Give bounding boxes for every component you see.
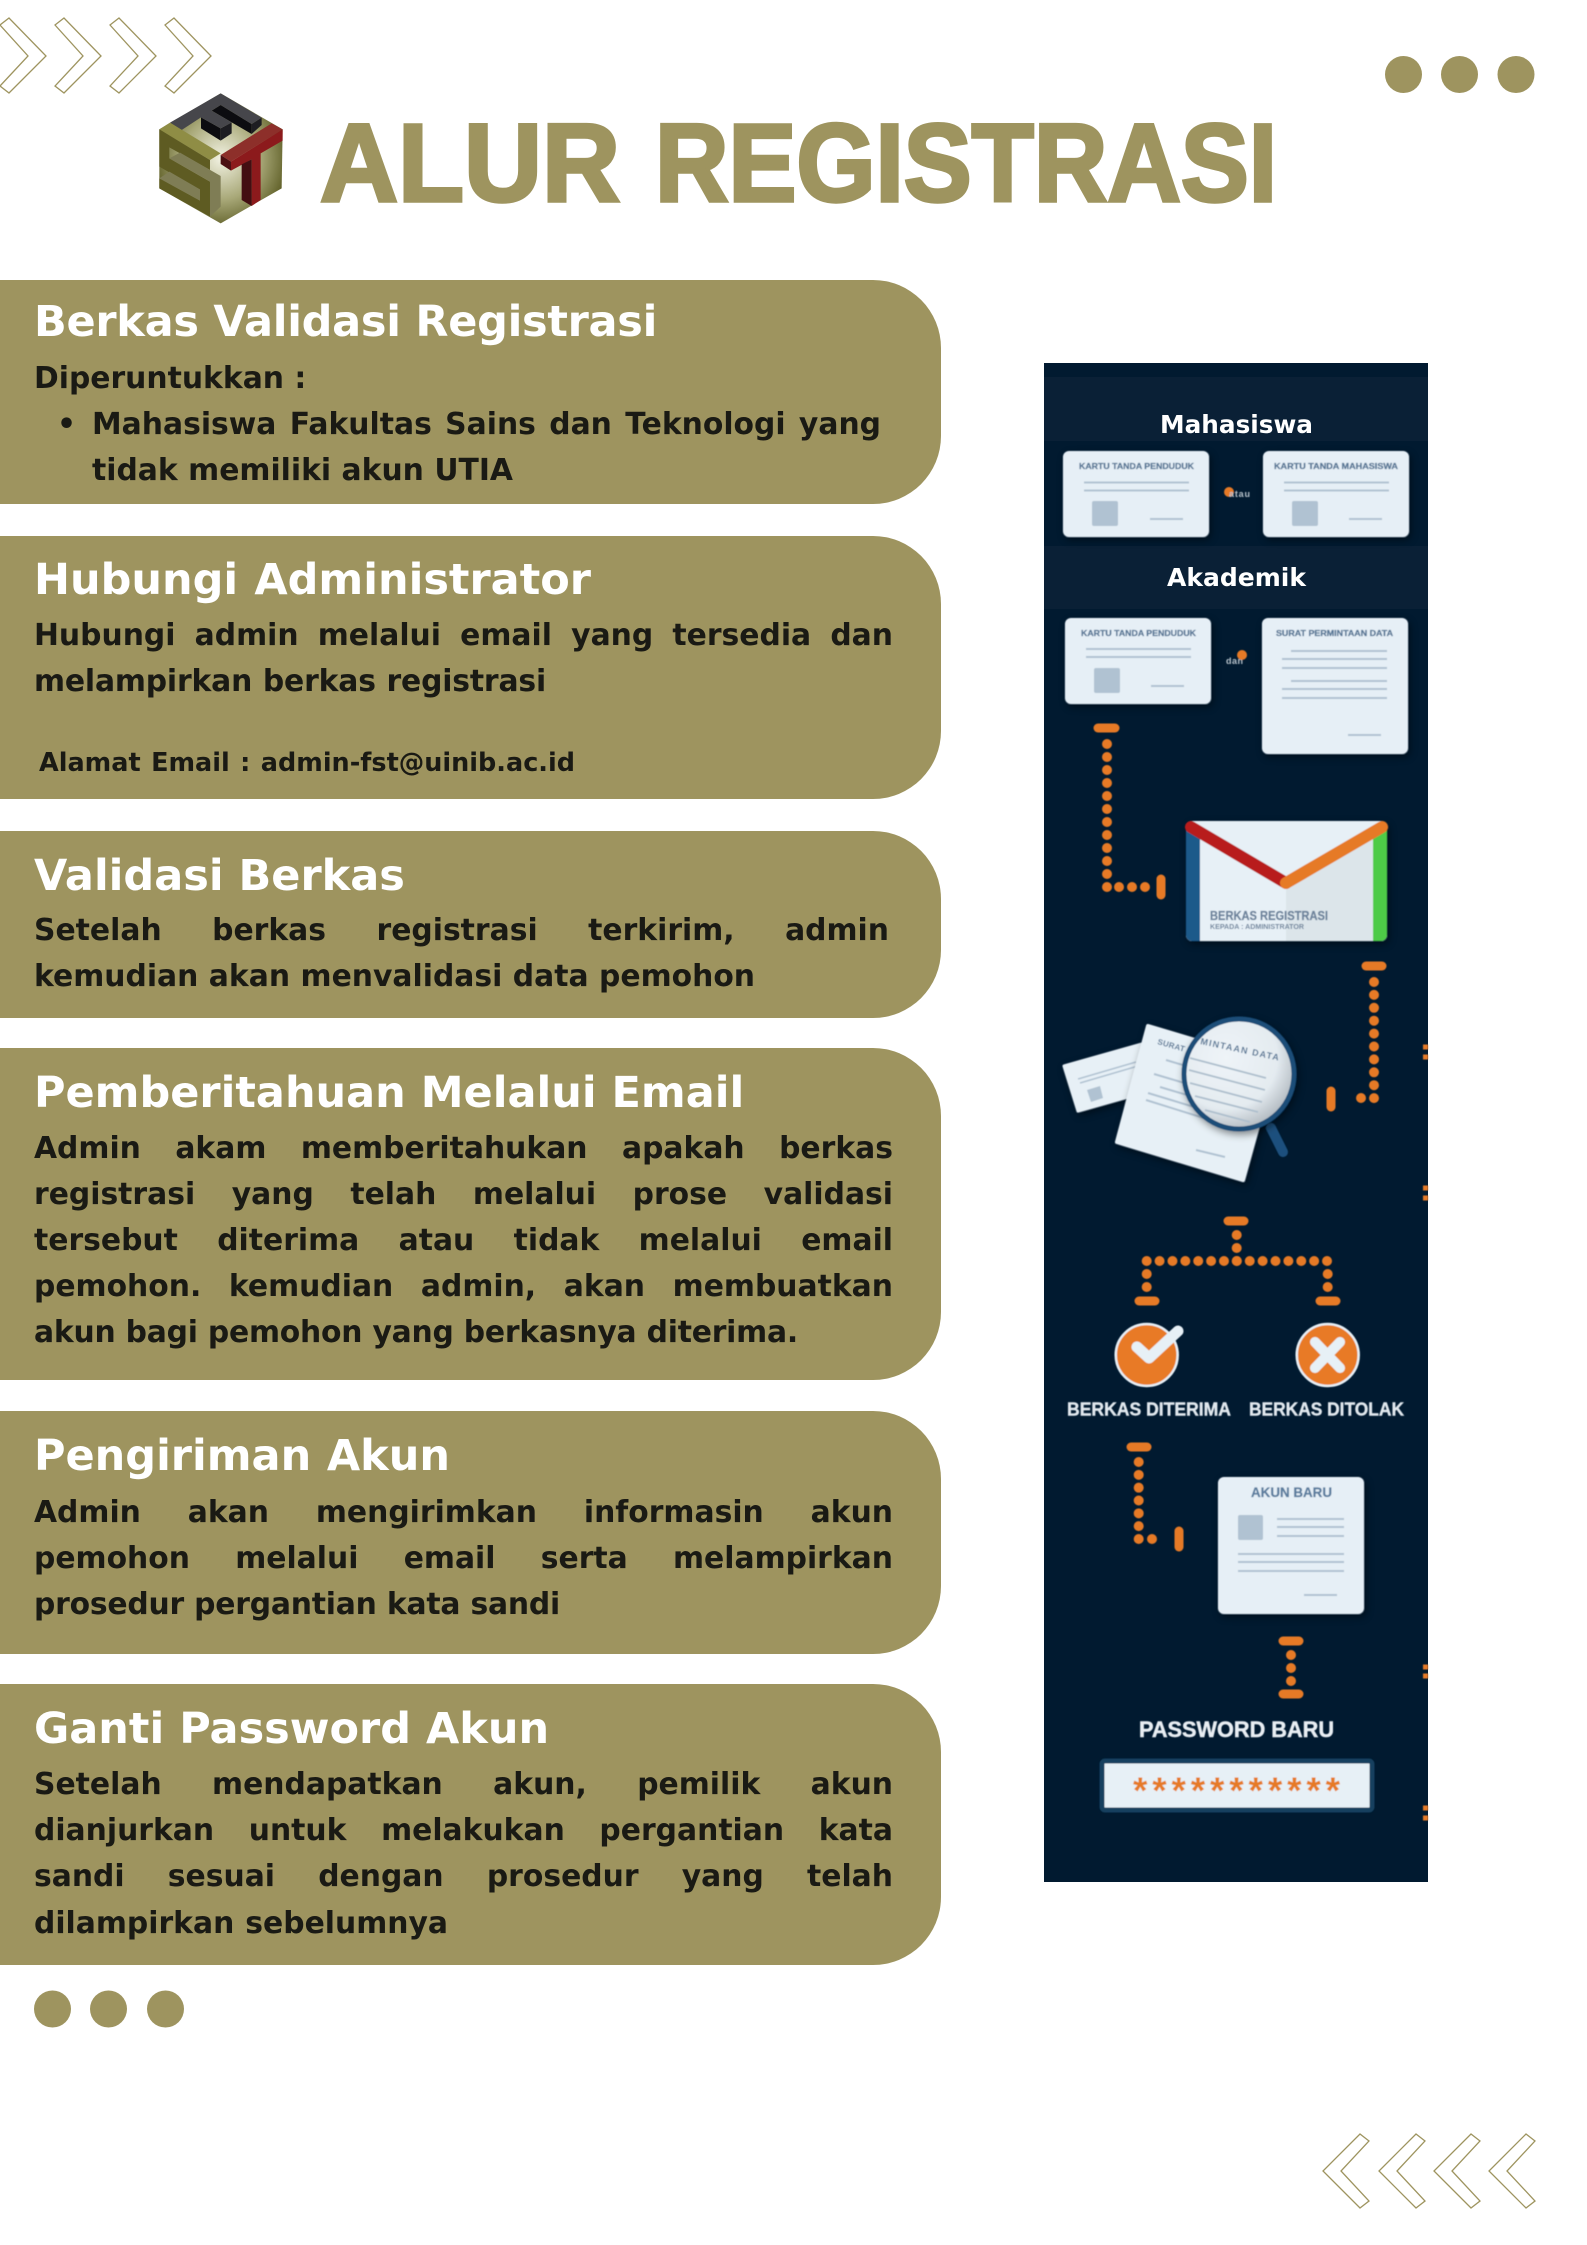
text block bbox=[34, 618, 893, 698]
decoration: top-right dots bbox=[1385, 56, 1534, 93]
connector: validation decision tree bbox=[1139, 1221, 1336, 1301]
icon: berkas ditolak cross bbox=[1297, 1324, 1359, 1386]
text block: tersebut diterima atau tidak melalui email bbox=[34, 1222, 893, 1258]
text block: melampirkan berkas registrasi bbox=[34, 664, 546, 698]
heading: Berkas Validasi Registrasi bbox=[34, 297, 657, 347]
text block bbox=[34, 1130, 893, 1350]
text: diperuntukkan: Diperuntukkan : bbox=[34, 360, 306, 396]
text block: Setelah mendapatkan akun, pemilik akun bbox=[34, 1766, 893, 1802]
icon: envelope berkas registrasi bbox=[1186, 821, 1387, 941]
text: bullet item: tidak memiliki akun UTIA bbox=[92, 452, 513, 488]
panel: pengiriman akun bbox=[0, 1411, 941, 1654]
text block: dianjurkan untuk melakukan pergantian kata bbox=[34, 1812, 893, 1848]
text block: Admin akam memberitahukan apakah berkas bbox=[34, 1130, 893, 1166]
card: kartu tanda penduduk (akademik) bbox=[1065, 618, 1211, 704]
card: kartu tanda penduduk (mahasiswa) bbox=[1063, 451, 1209, 537]
logo: FST isometric cube bbox=[159, 93, 283, 224]
heading: Pengiriman Akun bbox=[34, 1431, 450, 1481]
heading: Hubungi Administrator bbox=[34, 555, 591, 605]
heading: akademik: Akademik bbox=[1167, 563, 1307, 592]
text block bbox=[34, 912, 889, 994]
connector: envelope to validation bbox=[1331, 966, 1382, 1107]
text block: prosedur pergantian kata sandi bbox=[34, 1586, 560, 1622]
title: REGISTRASI bbox=[655, 102, 1277, 225]
card: kartu tanda mahasiswa: KARTU TANDA MAHASISWA bbox=[1274, 461, 1398, 471]
icon: documents under magnifying glass: MINTAAN DATA bbox=[1200, 1036, 1280, 1063]
panel: berkas validasi registrasi bbox=[0, 280, 941, 504]
card: kartu tanda penduduk (akademik): KARTU TANDA PENDUDUK bbox=[1081, 628, 1197, 638]
panel: pemberitahuan melalui email bbox=[0, 1048, 941, 1380]
text block: akun bagi pemohon yang berkasnya diterima. bbox=[34, 1314, 798, 1350]
text: bullet item: Mahasiswa Fakultas Sains dan Teknologi yang bbox=[92, 406, 881, 442]
title: ALUR bbox=[320, 102, 620, 225]
panel: hubungi administrator bbox=[0, 536, 941, 799]
text: email address: Alamat Email : admin-fst@uinib.ac.id bbox=[39, 748, 575, 778]
label: berkas ditolak: BERKAS DITOLAK bbox=[1249, 1400, 1404, 1420]
header band: akademik bbox=[1044, 546, 1428, 609]
icon: berkas diterima check bbox=[1116, 1324, 1178, 1386]
heading: Validasi Berkas bbox=[34, 851, 405, 901]
edge marks bbox=[1423, 1047, 1428, 1818]
text block: kemudian akan menvalidasi data pemohon bbox=[34, 958, 755, 994]
label: dan bbox=[1226, 650, 1247, 666]
text block: Hubungi admin melalui email yang tersedia dan bbox=[34, 618, 893, 652]
connector: new account to password bbox=[1283, 1641, 1299, 1694]
panel: validasi berkas bbox=[0, 831, 941, 1018]
card: surat permintaan data: SURAT PERMINTAAN DATA bbox=[1276, 628, 1393, 638]
card: akun baru bbox=[1218, 1477, 1364, 1614]
text block: dilampirkan sebelumnya bbox=[34, 1906, 448, 1940]
card: surat permintaan data bbox=[1262, 618, 1408, 754]
label: dan: dan bbox=[1226, 656, 1243, 666]
panel: ganti password akun bbox=[0, 1684, 941, 1965]
icon: envelope berkas registrasi: BERKAS REGISTRASI bbox=[1210, 908, 1328, 923]
text block: sandi sesuai dengan prosedur yang telah bbox=[34, 1858, 893, 1894]
icon: documents under magnifying glass: SURAT bbox=[1156, 1037, 1186, 1054]
decoration: bottom-left dots bbox=[34, 1990, 184, 2028]
card: kartu tanda mahasiswa bbox=[1263, 451, 1409, 537]
label: atau: atau bbox=[1229, 489, 1250, 499]
label: berkas diterima: BERKAS DITERIMA bbox=[1067, 1400, 1231, 1420]
text block: pemohon. kemudian admin, akan membuatkan bbox=[34, 1268, 893, 1304]
label: atau bbox=[1224, 487, 1250, 499]
connector: cards to envelope bbox=[1098, 728, 1161, 895]
text block: registrasi yang telah melalui prose validasi bbox=[34, 1176, 893, 1212]
card: akun baru: AKUN BARU bbox=[1251, 1484, 1332, 1500]
text: bullet item bbox=[92, 406, 881, 488]
text block bbox=[34, 1766, 893, 1940]
icon: envelope berkas registrasi: KEPADA : ADMINISTRATOR bbox=[1210, 924, 1304, 931]
label: password baru: PASSWORD BARU bbox=[1139, 1717, 1334, 1742]
heading: Ganti Password Akun bbox=[34, 1704, 549, 1754]
header band: mahasiswa bbox=[1044, 377, 1428, 441]
card: kartu tanda penduduk (mahasiswa): KARTU TANDA PENDUDUK bbox=[1079, 461, 1195, 471]
text block: Admin akan mengirimkan informasin akun bbox=[34, 1494, 893, 1530]
panel background bbox=[1044, 363, 1428, 1882]
connector: result to new account bbox=[1131, 1447, 1179, 1547]
text block: pemohon melalui email serta melampirkan bbox=[34, 1540, 893, 1576]
password field: *********** bbox=[1133, 1770, 1341, 1811]
title bbox=[320, 102, 1277, 225]
icon: documents under magnifying glass bbox=[1064, 1019, 1294, 1180]
password field bbox=[1102, 1761, 1372, 1811]
heading: mahasiswa: Mahasiswa bbox=[1160, 410, 1313, 439]
bullet: • bbox=[57, 406, 76, 442]
heading: Pemberitahuan Melalui Email bbox=[34, 1068, 744, 1118]
text block bbox=[34, 1494, 893, 1622]
text block: Setelah berkas registrasi terkirim, admin bbox=[34, 912, 889, 948]
